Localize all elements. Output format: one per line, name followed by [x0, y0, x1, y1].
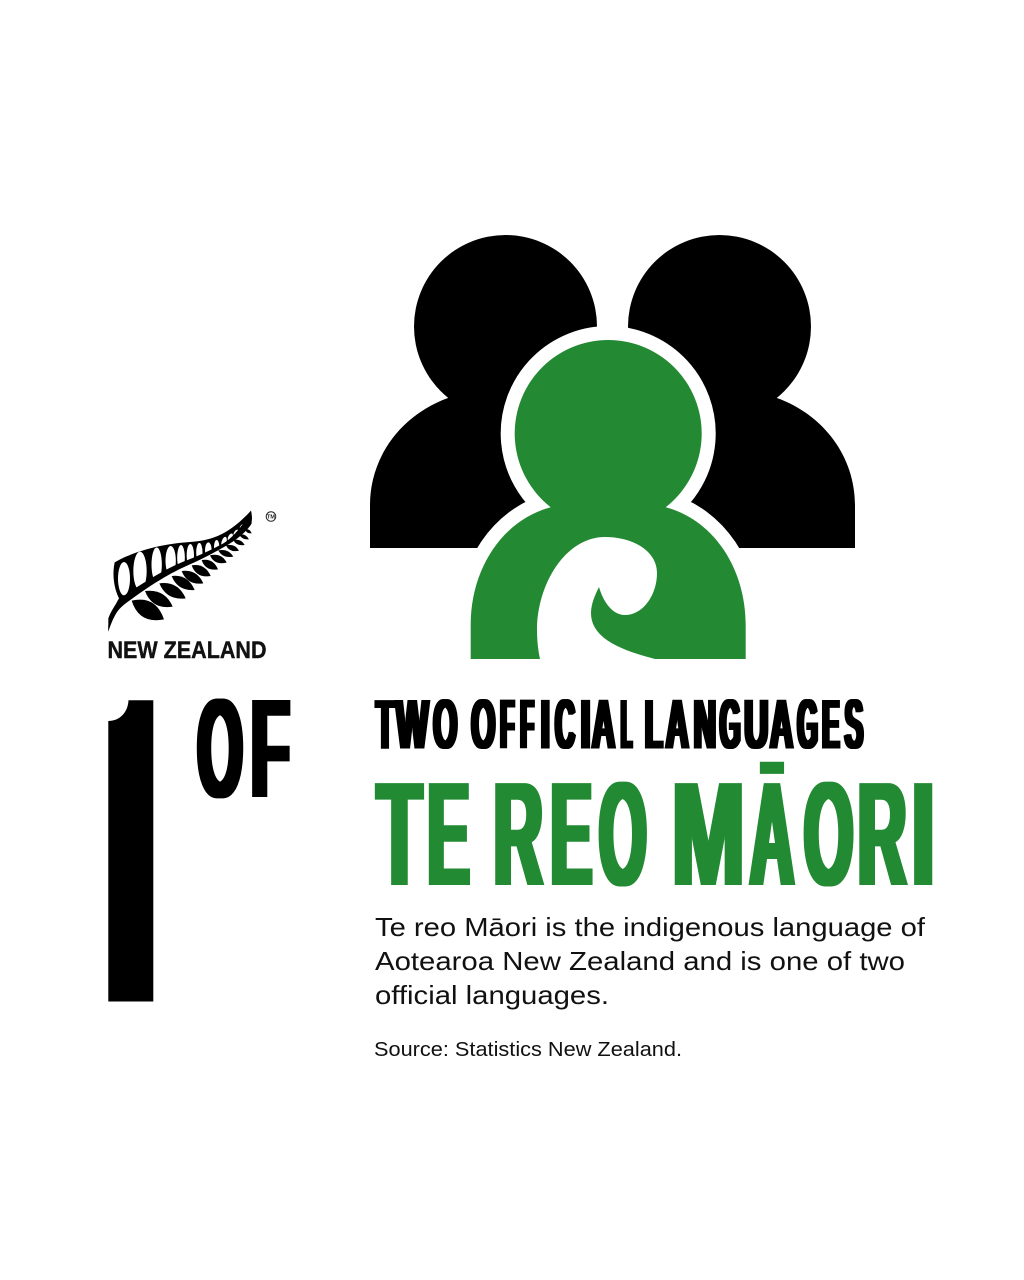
heading: two official languages: A	[770, 684, 793, 764]
text: 1	[108, 605, 153, 1096]
heading: te reo maori: Ā	[750, 752, 794, 917]
heading: te reo maori: O	[599, 752, 646, 917]
logo: New Zealand silver fern	[108, 511, 276, 664]
icon: trademark symbol: TM	[267, 514, 275, 520]
heading: two official languages: I	[580, 684, 591, 764]
text: S	[845, 684, 863, 764]
heading: two official languages: T	[376, 684, 394, 764]
heading: two official languages: O	[433, 684, 457, 764]
heading: two official languages: F	[500, 684, 514, 764]
heading: two official languages: E	[822, 684, 839, 764]
heading: two official languages: O	[471, 684, 495, 764]
heading: te reo maori: I	[912, 752, 935, 917]
heading: two official languages: I	[541, 684, 550, 764]
body text: official languages.	[375, 980, 609, 1010]
icon: black person left and right	[370, 235, 855, 548]
heading: two official languages: A	[592, 684, 615, 764]
heading: te reo maori: E	[428, 752, 470, 917]
body text	[375, 912, 926, 1010]
heading: te reo maori: M	[672, 752, 745, 917]
heading: OF: O	[197, 669, 243, 827]
icon: green person with koru	[471, 340, 746, 659]
heading: te reo maori: R	[858, 752, 906, 917]
body text: Te reo Māori is the indigenous language of	[375, 912, 926, 942]
heading: te reo maori: E	[551, 752, 592, 917]
heading: two official languages: C	[555, 684, 575, 764]
heading: two official languages: L	[621, 684, 632, 764]
icon: three people with koru	[370, 235, 855, 659]
icon: trademark symbol	[266, 512, 276, 521]
heading: two official languages: L	[645, 684, 663, 764]
heading: te reo maori: R	[494, 752, 543, 917]
heading: two official languages: G	[720, 684, 740, 764]
icon: fern	[108, 511, 252, 632]
heading: two official languages: W	[396, 684, 429, 764]
body text: Aotearoa New Zealand and is one of two	[375, 946, 905, 976]
heading: two official languages: N	[694, 684, 716, 764]
heading: two official languages: F	[520, 684, 534, 764]
logo wordmark: NEW ZEALAND	[108, 637, 266, 664]
heading: te reo maori: T	[377, 752, 422, 917]
source note: Source: Statistics New Zealand.	[374, 1038, 682, 1061]
text: F	[251, 669, 290, 827]
heading: two official languages: A	[666, 684, 689, 764]
heading: two official languages: G	[797, 684, 818, 764]
heading: two official languages: U	[744, 684, 768, 764]
heading: te reo maori: O	[804, 752, 853, 917]
